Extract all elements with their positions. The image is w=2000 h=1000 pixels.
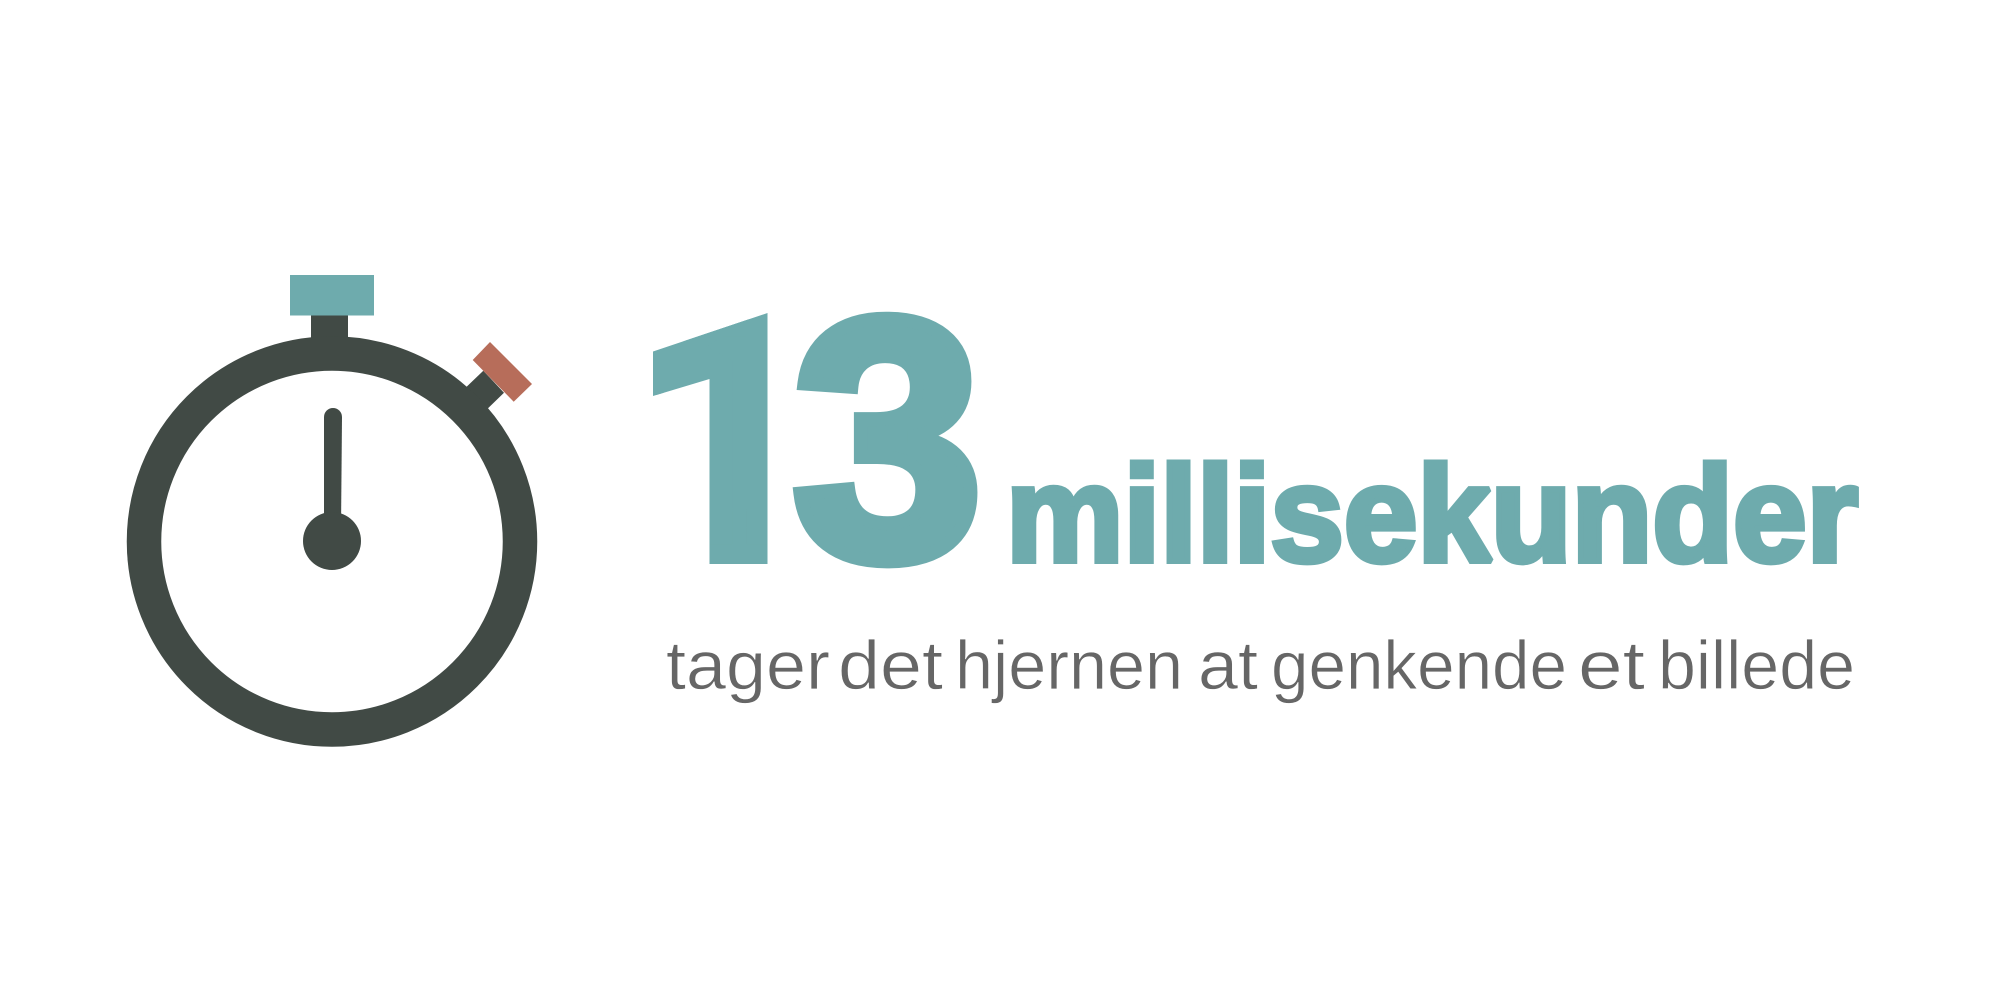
stopwatch hand [324, 408, 342, 530]
digit 3: 3 [793, 248, 983, 630]
stopwatch side stem [457, 371, 504, 417]
stopwatch side button [473, 342, 532, 402]
icon: stopwatch [144, 275, 532, 730]
subtitle text: tager [666, 627, 830, 704]
number: 13 [653, 312, 978, 568]
infographic canvas [126, 275, 1859, 747]
subtitle text: et [1578, 627, 1645, 704]
stopwatch top button [290, 275, 374, 316]
subtitle text: hjernen [955, 627, 1183, 704]
stopwatch top stem [311, 310, 348, 345]
subtitle text: det [838, 627, 943, 704]
digit 1: 1 [632, 243, 830, 640]
stopwatch ring [144, 354, 520, 730]
subtitle text: genkende [1271, 627, 1567, 704]
subtitle text [666, 627, 1855, 704]
subtitle text: at [1198, 627, 1258, 704]
subtitle text: billede [1658, 627, 1855, 704]
stopwatch hub [303, 512, 361, 570]
unit heading: millisekunder [1006, 438, 1858, 590]
